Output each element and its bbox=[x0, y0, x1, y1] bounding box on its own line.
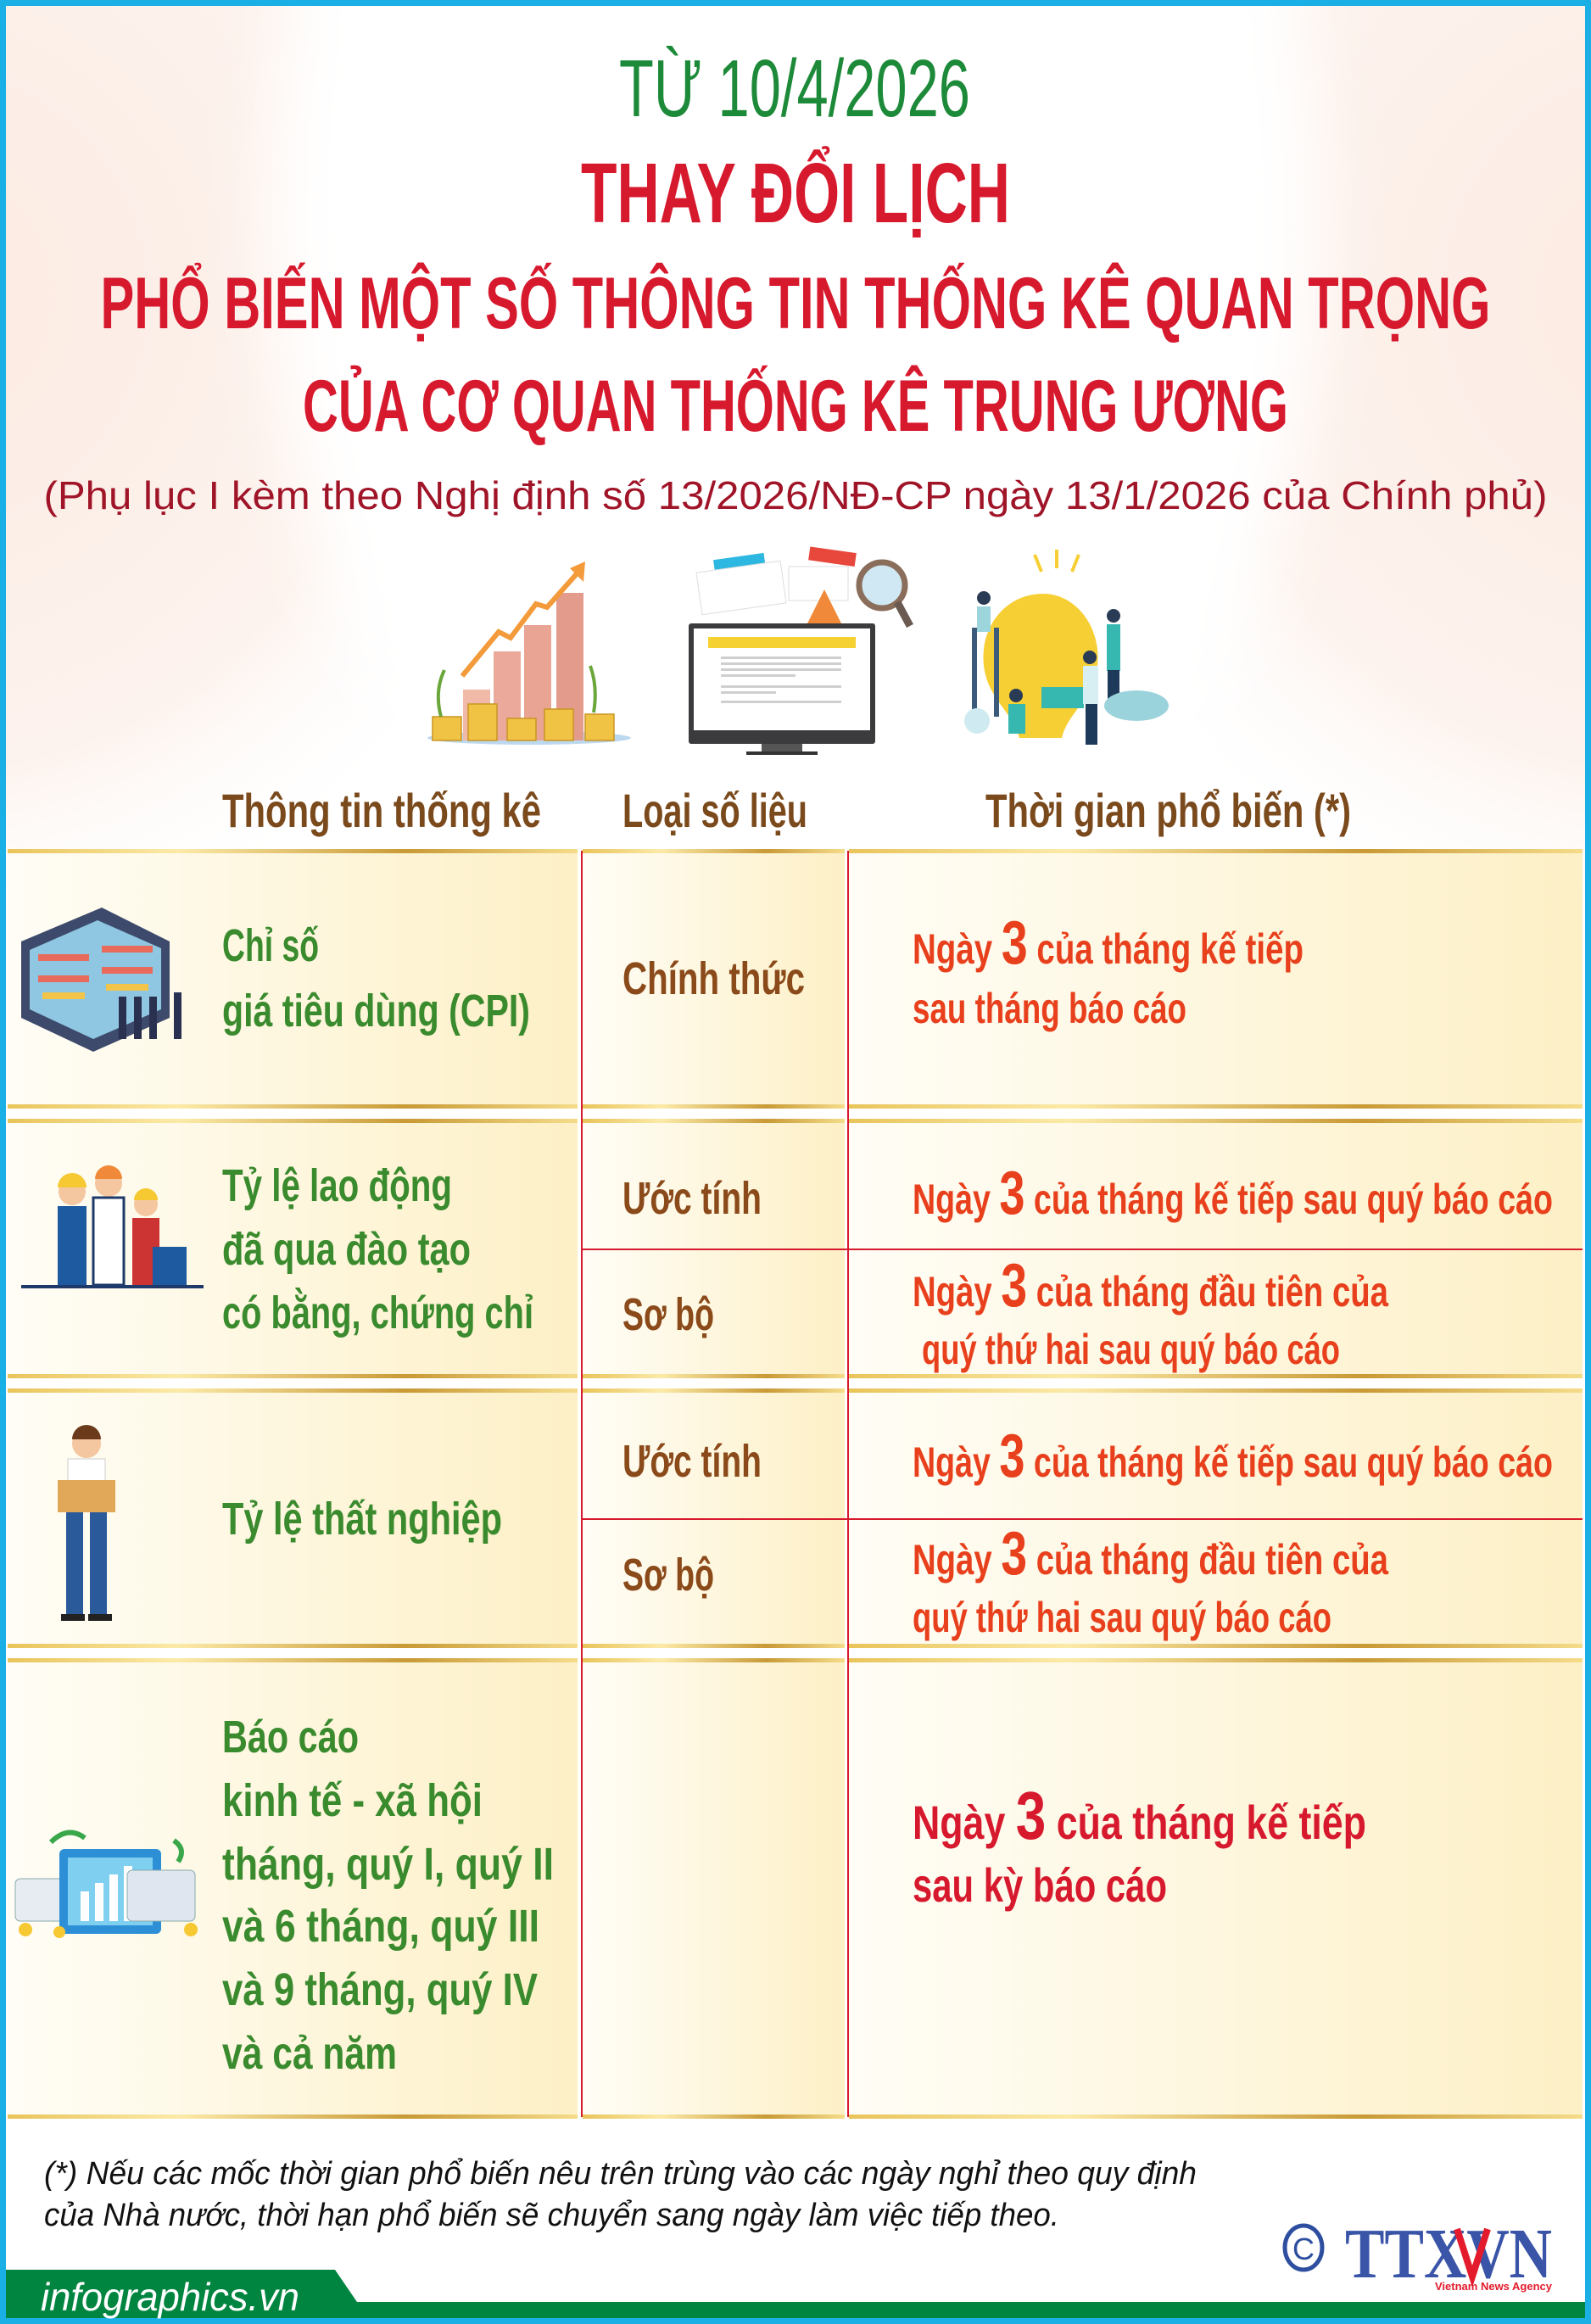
footnote: (*) Nếu các mốc thời gian phổ biến nêu trên trùng vào các ngày nghỉ theo quy định bbox=[44, 2156, 1197, 2192]
column headers: Thời gian phổ biến (*) bbox=[985, 784, 1351, 837]
column headers: Thông tin thống kê bbox=[222, 784, 541, 837]
row 1: CPI: sau tháng báo cáo bbox=[913, 985, 1186, 1032]
subtitle: (Phụ lục I kèm theo Nghị định số 13/2026/NĐ-CP ngày 13/1/2026 của Chính phủ) bbox=[44, 473, 1548, 517]
row 2: trained labour: có bằng, chứng chỉ bbox=[222, 1288, 533, 1338]
column headers: Loại số liệu bbox=[622, 784, 807, 837]
logo: TTXVN: C bbox=[1292, 2232, 1315, 2266]
row 4: socio-economic report: sau kỳ báo cáo bbox=[913, 1858, 1167, 1912]
row 3: unemployment bbox=[58, 1422, 1553, 1641]
icon: monitor with documents bbox=[689, 546, 910, 755]
row 3: unemployment: Ước tính bbox=[622, 1436, 762, 1487]
logo: TTXVN: Vietnam News Agency bbox=[1435, 2280, 1553, 2293]
logo: TTXVN: TTXVN bbox=[1345, 2215, 1552, 2293]
footnote: của Nhà nước, thời hạn phổ biến sẽ chuyển sang ngày làm việc tiếp theo. bbox=[44, 2198, 1059, 2233]
row 4: socio-economic report: và 9 tháng, quý IV bbox=[222, 1964, 538, 2015]
footer: green bar with site name bbox=[6, 2270, 1585, 2319]
table cells background bbox=[8, 849, 1583, 2119]
row 1: CPI: giá tiêu dùng (CPI) bbox=[222, 986, 530, 1036]
row 3: unemployment: Ngày 3 của tháng đầu tiên của bbox=[913, 1520, 1389, 1588]
row 4: socio-economic report: kinh tế - xã hội bbox=[222, 1775, 483, 1826]
icon: light bulb with people bbox=[964, 550, 1169, 745]
logo: TTXVN bbox=[1285, 2215, 1553, 2293]
row 4: socio-economic report bbox=[15, 1712, 1366, 2079]
row 2: trained labour: Tỷ lệ lao động bbox=[222, 1160, 452, 1211]
row 3: unemployment: Tỷ lệ thất nghiệp bbox=[222, 1494, 502, 1545]
row 4: socio-economic report: và cả năm bbox=[222, 2028, 397, 2079]
row 4: socio-economic report: tháng, quý I, quý II bbox=[222, 1839, 554, 1890]
row 2: trained labour: Ngày 3 của tháng đầu tiên của bbox=[913, 1252, 1389, 1320]
row 4: socio-economic report: Báo cáo bbox=[222, 1712, 359, 1763]
icon: man with box bbox=[58, 1425, 115, 1621]
icon: growth chart with coins bbox=[427, 561, 631, 745]
row 4: socio-economic report: và 6 tháng, quý III bbox=[222, 1901, 539, 1952]
row 1: CPI bbox=[21, 908, 1304, 1052]
row 2: trained labour: Ước tính bbox=[622, 1173, 762, 1224]
row 1: CPI: Chính thức bbox=[622, 953, 805, 1004]
footnote bbox=[44, 2156, 1197, 2233]
row 2: trained labour bbox=[21, 1159, 1553, 1373]
row 3: unemployment: quý thứ hai sau quý báo cáo bbox=[913, 1594, 1331, 1641]
row 2: trained labour: Sơ bộ bbox=[622, 1289, 714, 1340]
icon: report dashboard bbox=[15, 1833, 198, 1938]
icon: workers bbox=[21, 1165, 204, 1288]
row 2: trained labour: quý thứ hai sau quý báo cáo bbox=[922, 1326, 1340, 1373]
column headers bbox=[222, 784, 1351, 837]
footer: green bar with site name: infographics.vn bbox=[41, 2275, 299, 2319]
title: date: TỪ 10/4/2026 bbox=[619, 43, 970, 134]
row 1: CPI: Chỉ số bbox=[222, 920, 319, 971]
row 4: socio-economic report: Ngày 3 của tháng kế tiếp bbox=[913, 1778, 1366, 1853]
title: main: THAY ĐỔI LỊCH bbox=[581, 146, 1010, 241]
icon: supermarket bbox=[21, 908, 181, 1052]
row 2: trained labour: đã qua đào tạo bbox=[222, 1224, 471, 1275]
row 1: CPI: Ngày 3 của tháng kế tiếp bbox=[913, 909, 1304, 977]
row 3: unemployment: Sơ bộ bbox=[622, 1550, 714, 1601]
